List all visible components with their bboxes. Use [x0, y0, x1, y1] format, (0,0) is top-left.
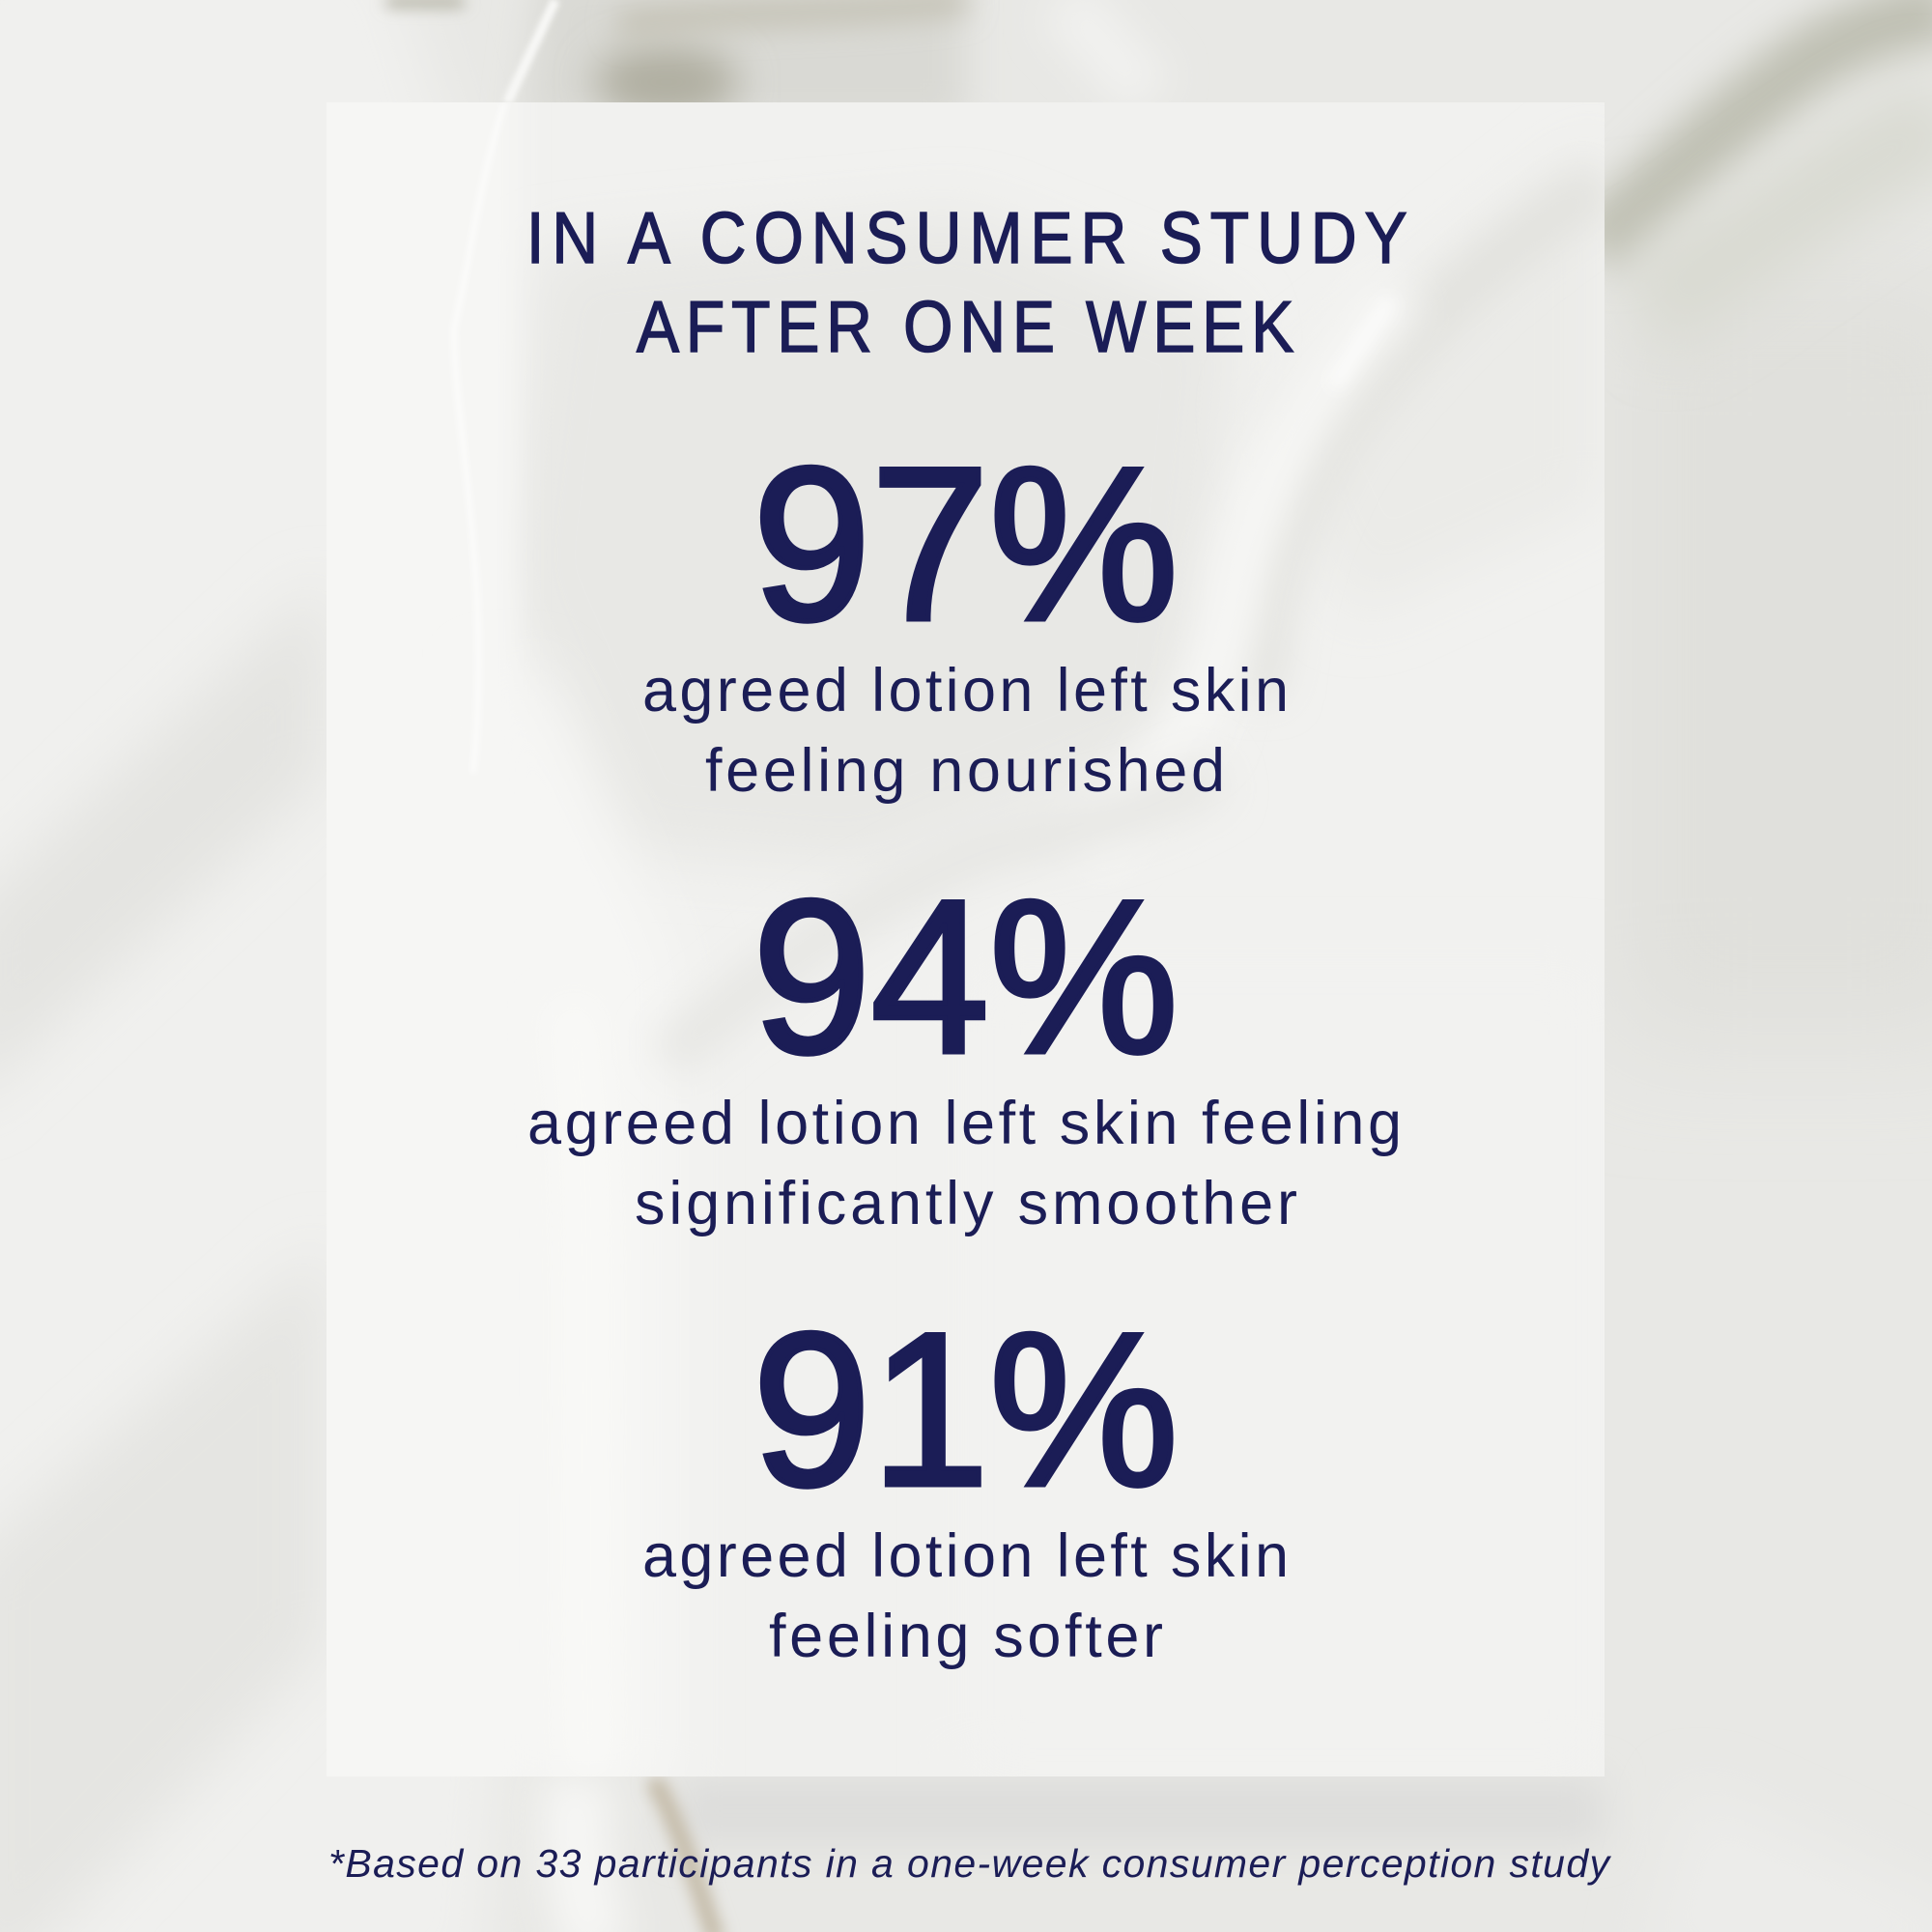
stat: 91 percent softer: feeling softer [769, 1603, 1163, 1670]
heading [526, 197, 1407, 367]
stat: 97 percent nourished: agreed lotion left skin [642, 657, 1289, 724]
stat: 91 percent softer: 91% [753, 1287, 1179, 1531]
stat: 97 percent nourished: 97% [753, 421, 1179, 666]
content layer [327, 102, 1611, 1886]
stat: 97 percent nourished [642, 421, 1289, 805]
stat: 94 percent smoother: agreed lotion left skin feeling [527, 1090, 1402, 1157]
heading: AFTER ONE WEEK [637, 286, 1293, 367]
footnote: *Based on 33 participants in a one-week consumer perception study [328, 1841, 1611, 1886]
panel: consumer study results [290, 58, 1605, 1797]
panel background [290, 58, 1605, 1797]
stat: 94 percent smoother: significantly smoother [635, 1170, 1297, 1237]
stat: 91 percent softer: agreed lotion left skin [642, 1522, 1289, 1590]
stat: 91 percent softer [642, 1287, 1289, 1670]
heading: IN A CONSUMER STUDY [526, 197, 1407, 278]
stat: 97 percent nourished: feeling nourished [705, 737, 1225, 805]
stat: 94 percent smoother: 94% [753, 854, 1179, 1098]
stat: 94 percent smoother [527, 854, 1402, 1237]
